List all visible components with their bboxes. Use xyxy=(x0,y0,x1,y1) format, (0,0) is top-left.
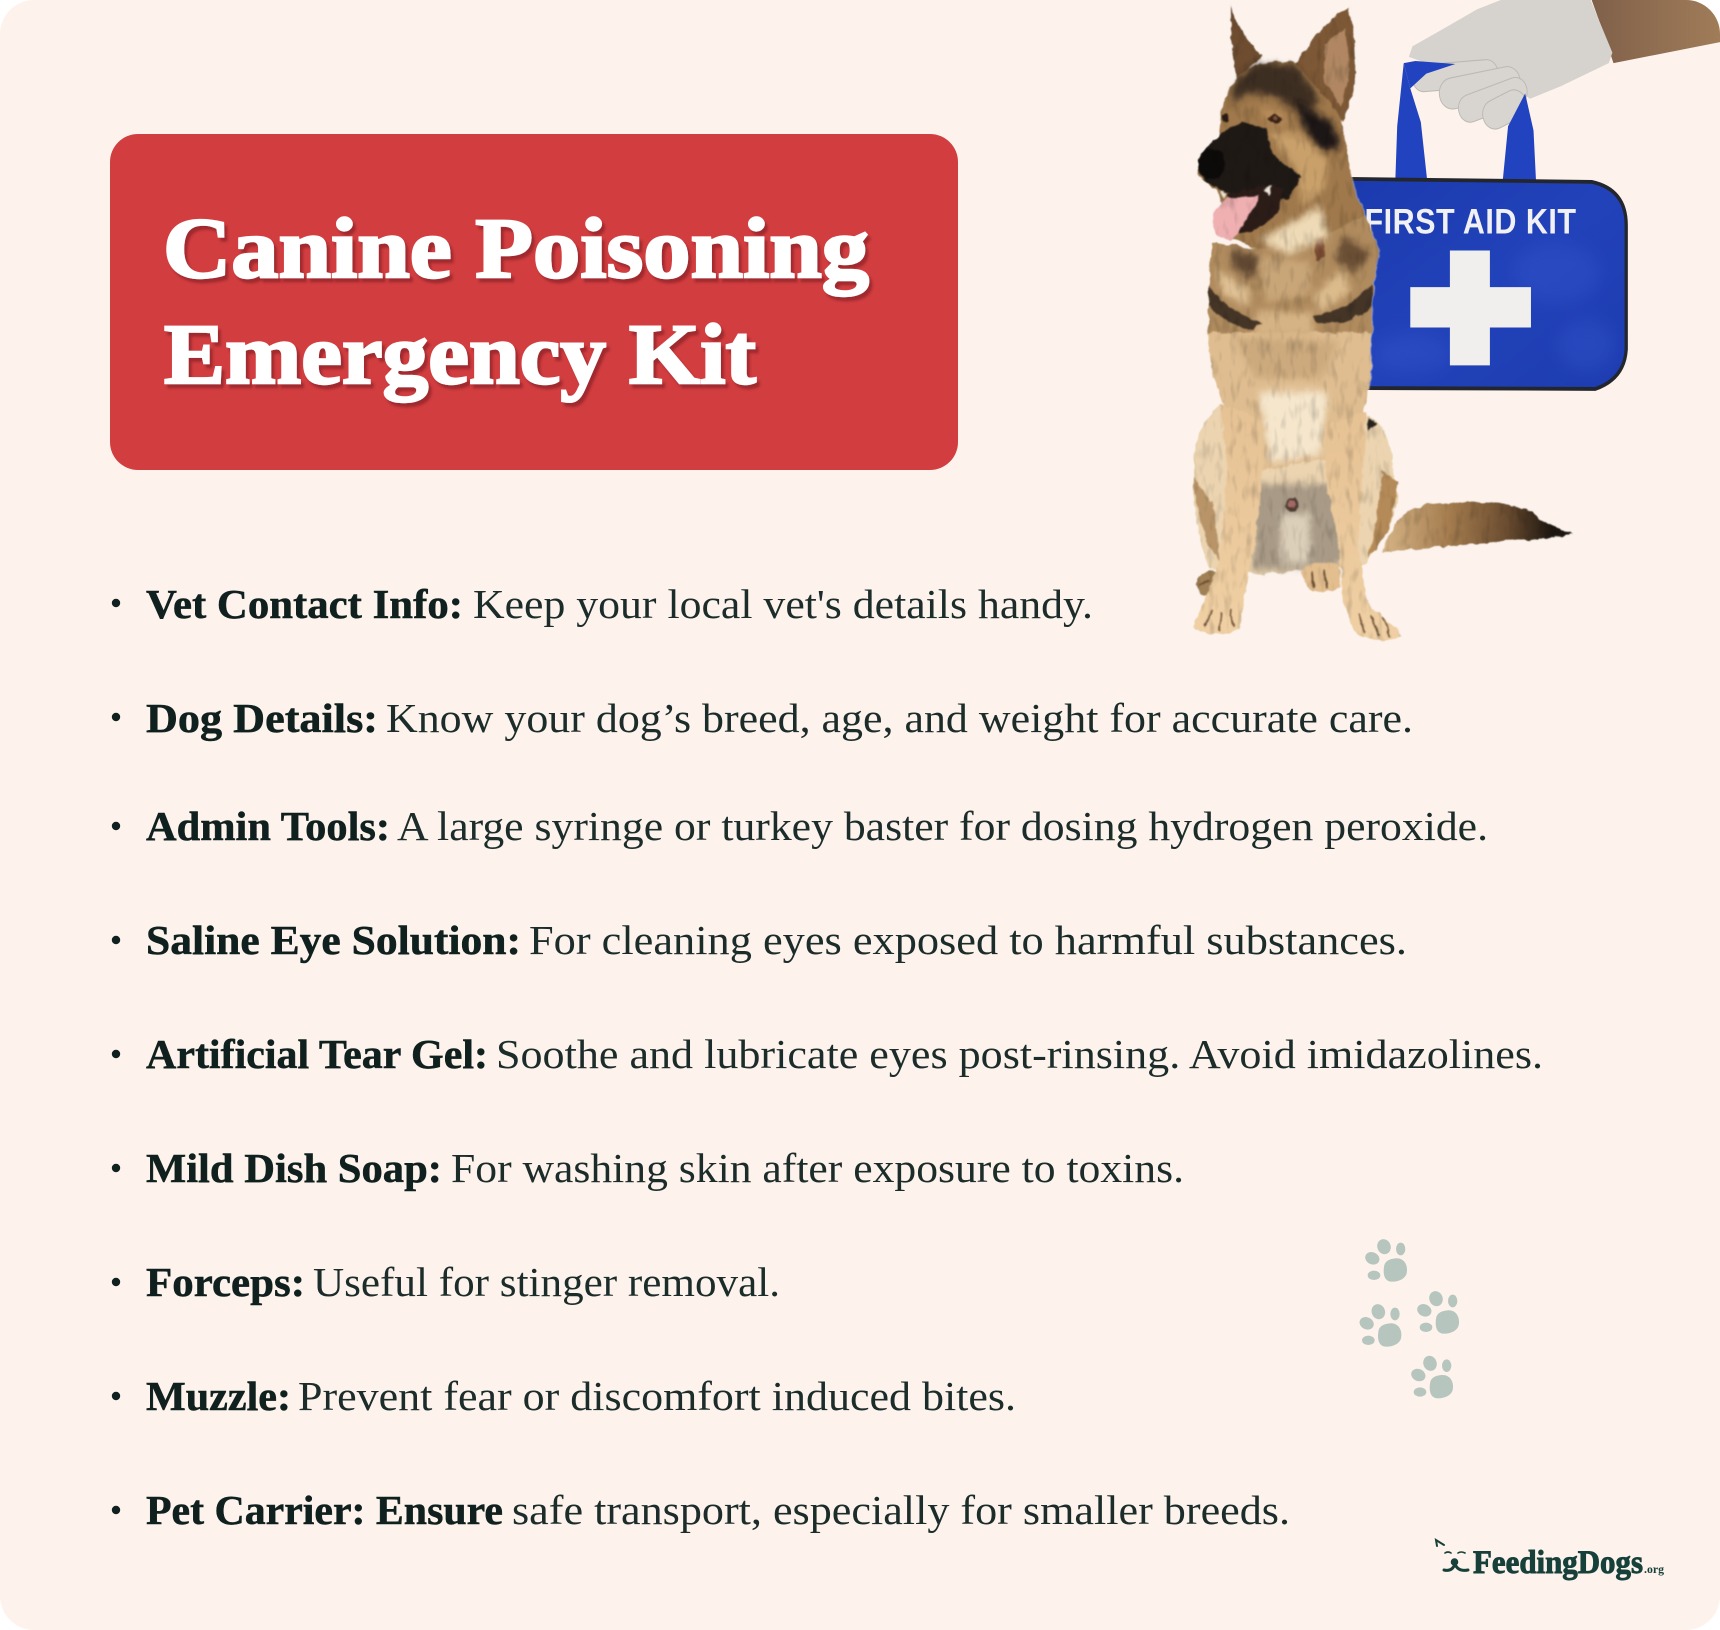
item: saline eye solution xyxy=(112,917,1407,963)
bag label: FIRST AID KIT xyxy=(1364,202,1576,241)
item: vet contact info: Vet Contact Info: xyxy=(146,581,463,627)
bag body xyxy=(1349,179,1626,389)
left ear xyxy=(1230,3,1263,78)
illustration: dog with first aid kit held by gloved hand xyxy=(1192,0,1720,642)
chest and body xyxy=(1208,320,1372,471)
white cross xyxy=(1410,250,1531,365)
item: muzzle: Muzzle: xyxy=(146,1373,291,1419)
fingers xyxy=(1412,59,1530,134)
item: artificial tear gel: Artificial Tear Gel: xyxy=(146,1031,488,1077)
item: admin tools: A large syringe or turkey baster for dosing hydrogen peroxide. xyxy=(397,803,1488,849)
item: artificial tear gel: Soothe and lubricate eyes post-rinsing. Avoid imidazolines. xyxy=(496,1031,1543,1077)
paw print 1 xyxy=(1363,1237,1407,1282)
item: forceps xyxy=(112,1259,780,1305)
collar tag xyxy=(1314,236,1325,260)
logo wordmark: FeedingDogs xyxy=(1473,1545,1643,1581)
item: artificial tear gel xyxy=(112,1031,1543,1077)
paw print 4 xyxy=(1409,1354,1453,1398)
hind paws xyxy=(1195,562,1341,596)
item: pet carrier: safe transport, especially for smaller breeds. xyxy=(512,1487,1290,1533)
item: dog details: Dog Details: xyxy=(146,695,378,741)
neck ruff xyxy=(1208,189,1380,333)
item: vet contact info: Keep your local vet's details handy. xyxy=(473,581,1093,627)
title banner xyxy=(110,134,958,470)
title text: Emergency Kit xyxy=(164,306,756,402)
item: mild dish soap: For washing skin after exposure to toxins. xyxy=(451,1145,1184,1191)
banner background xyxy=(110,134,958,470)
bag straps xyxy=(1395,61,1536,182)
eyes xyxy=(1268,115,1283,124)
tail xyxy=(1383,501,1575,552)
item: pet carrier xyxy=(112,1487,1290,1533)
belly spot xyxy=(1287,498,1297,510)
paw toe lines xyxy=(1201,570,1391,636)
logo: FeedingDogs.org xyxy=(1434,1538,1664,1581)
haunches xyxy=(1192,404,1399,575)
item: muzzle: Prevent fear or discomfort induced bites. xyxy=(298,1373,1016,1419)
head xyxy=(1198,61,1364,255)
logo dog face icon xyxy=(1436,1540,1468,1570)
item: mild dish soap: Mild Dish Soap: xyxy=(146,1145,442,1191)
muzzle xyxy=(1198,122,1301,200)
item: forceps: Useful for stinger removal. xyxy=(313,1259,780,1305)
front legs xyxy=(1192,404,1403,641)
first aid kit bag xyxy=(1349,61,1626,389)
mouth xyxy=(1228,185,1284,234)
teeth xyxy=(1221,186,1272,199)
item: saline eye solution: Saline Eye Solution: xyxy=(146,917,521,963)
item: pet carrier: Pet Carrier: Ensure xyxy=(146,1487,503,1533)
checklist xyxy=(112,581,1543,1572)
right ear xyxy=(1295,8,1356,123)
item: vet contact info xyxy=(112,581,1093,627)
item: admin tools: Admin Tools: xyxy=(146,803,390,849)
item: dog details: Know your dog’s breed, age, and weight for accurate care. xyxy=(386,695,1413,741)
item: saline eye solution: For cleaning eyes exposed to harmful substances. xyxy=(529,917,1407,963)
belly xyxy=(1254,484,1344,570)
tongue xyxy=(1212,194,1259,241)
gloved hand and arm xyxy=(1409,0,1720,134)
paw print 3 xyxy=(1415,1289,1459,1334)
title text xyxy=(163,200,869,402)
german shepherd dog xyxy=(1192,3,1575,641)
fabric highlights xyxy=(1372,244,1615,373)
title text: Canine Poisoning xyxy=(163,200,869,296)
logo suffix: .org xyxy=(1644,1562,1664,1576)
decorative paw prints xyxy=(1360,1239,1460,1398)
item: forceps: Forceps: xyxy=(146,1259,305,1305)
nose xyxy=(1198,149,1226,179)
paw print 2 xyxy=(1357,1302,1401,1347)
item: mild dish soap xyxy=(112,1145,1184,1191)
